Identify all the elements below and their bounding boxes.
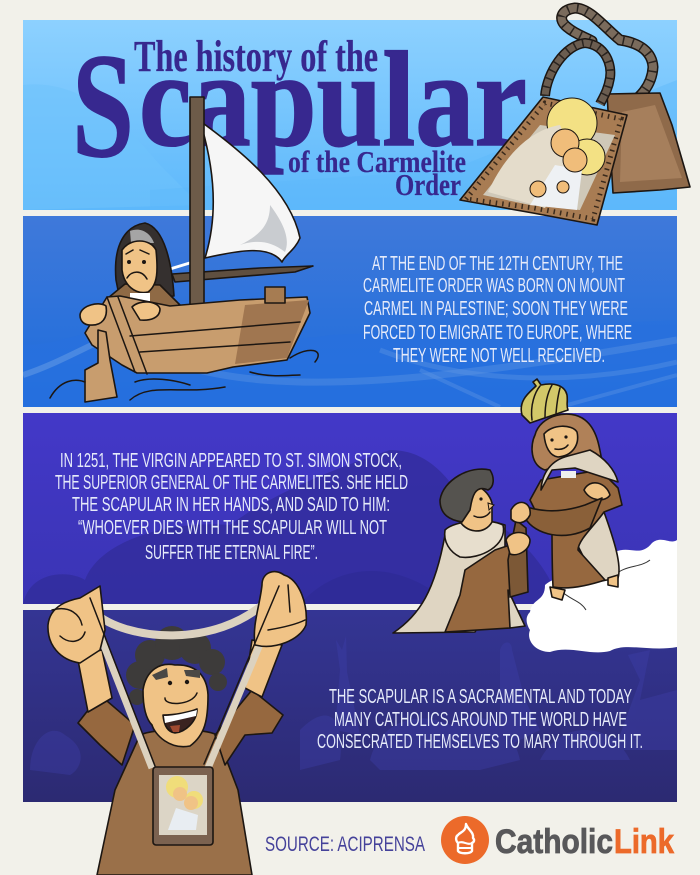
scapular on chest: [153, 767, 213, 845]
icon: brown scapular: [460, 8, 690, 225]
rudder: [85, 330, 117, 402]
illustration: friar in a sailing boat: [50, 97, 318, 402]
brown robe: [530, 470, 622, 588]
text: apparition: THE SCAPULAR IN HER HANDS, AND SAID TO HIM:: [72, 494, 390, 516]
boom and rope: [172, 266, 313, 282]
panel: apparition background: [23, 413, 677, 604]
sleeves: [78, 695, 135, 765]
text: emigration: [363, 253, 632, 367]
scapular image: [483, 125, 615, 210]
sail: [200, 121, 300, 262]
face: [544, 426, 578, 457]
raised right hand: [254, 572, 306, 646]
title: The history of the: The history of the: [134, 32, 378, 81]
text: apparition: [55, 450, 408, 564]
panel: title background: [23, 20, 677, 210]
back rope loop: [562, 8, 653, 107]
Mary's sleeve reaching: [520, 498, 602, 535]
text: apparition: SUFFER THE ETERNAL FIRE”.: [145, 542, 318, 564]
title: Scapular: [72, 23, 527, 189]
neck strap left: [86, 600, 152, 768]
feet: [550, 587, 565, 600]
hair: [532, 414, 603, 470]
friar: [108, 223, 183, 312]
cream cape: [393, 522, 505, 633]
panel: devotion background: [23, 610, 677, 802]
hands: [80, 304, 106, 325]
neck cowl: [445, 521, 504, 557]
hand on robe: [584, 483, 610, 500]
strap edge lines: [90, 586, 279, 766]
hair: [126, 626, 227, 705]
front cloth patch: [460, 97, 627, 225]
open mouth: [163, 709, 197, 733]
text: apparition: IN 1251, THE VIRGIN APPEARED TO ST. SIMON STOCK,: [60, 450, 402, 472]
brows: [152, 668, 200, 680]
water ripples: [50, 350, 318, 400]
text: devotion today: [317, 686, 643, 753]
illustration: crowned Virgin Mary: [521, 379, 622, 600]
back cloth patch: [607, 93, 690, 193]
text: apparition: THE SUPERIOR GENERAL OF THE CARMELITES. SHE HELD: [55, 472, 408, 494]
raised left hand: [48, 586, 105, 663]
brown habit: [445, 545, 512, 632]
subtitle: of the Carmelite: of the Carmelite: [288, 144, 466, 179]
hull: [85, 296, 310, 373]
held scapular cloth: [508, 520, 528, 597]
panel: emigration background: [23, 216, 677, 407]
hands: [506, 502, 530, 555]
robe body: [97, 730, 252, 875]
logo text: CatholicLink: Link: [614, 823, 674, 861]
title: Scapular: capular: [139, 25, 527, 175]
hair: [440, 469, 493, 522]
icon: CatholicLink flame logo: [441, 816, 489, 864]
crown: [521, 379, 568, 423]
logo text: CatholicLink: Catholic: [495, 823, 613, 861]
illustration: St. Simon Stock kneeling: [393, 469, 602, 633]
title: Scapular: S: [72, 23, 134, 189]
illustration: man holding up scapular: [48, 572, 306, 875]
collar clasp: [561, 471, 576, 478]
mast: [190, 97, 204, 309]
cape front edge: [508, 590, 525, 628]
cream mantle back: [575, 512, 619, 582]
face: [455, 485, 492, 531]
stern post: [265, 287, 285, 303]
text: source: SOURCE: ACIPRENSA: [265, 833, 425, 856]
neck strap right: [208, 587, 284, 768]
mantle over shoulders: [541, 450, 618, 490]
subtitle: Order: Order: [395, 167, 461, 202]
front rope loop: [545, 43, 610, 104]
face: [143, 664, 208, 747]
text: apparition: “WHOEVER DIES WITH THE SCAPULAR WILL NOT: [78, 517, 387, 539]
illustration: cloud: [527, 540, 677, 652]
arms: [77, 650, 112, 712]
strap over head: [95, 600, 268, 635]
